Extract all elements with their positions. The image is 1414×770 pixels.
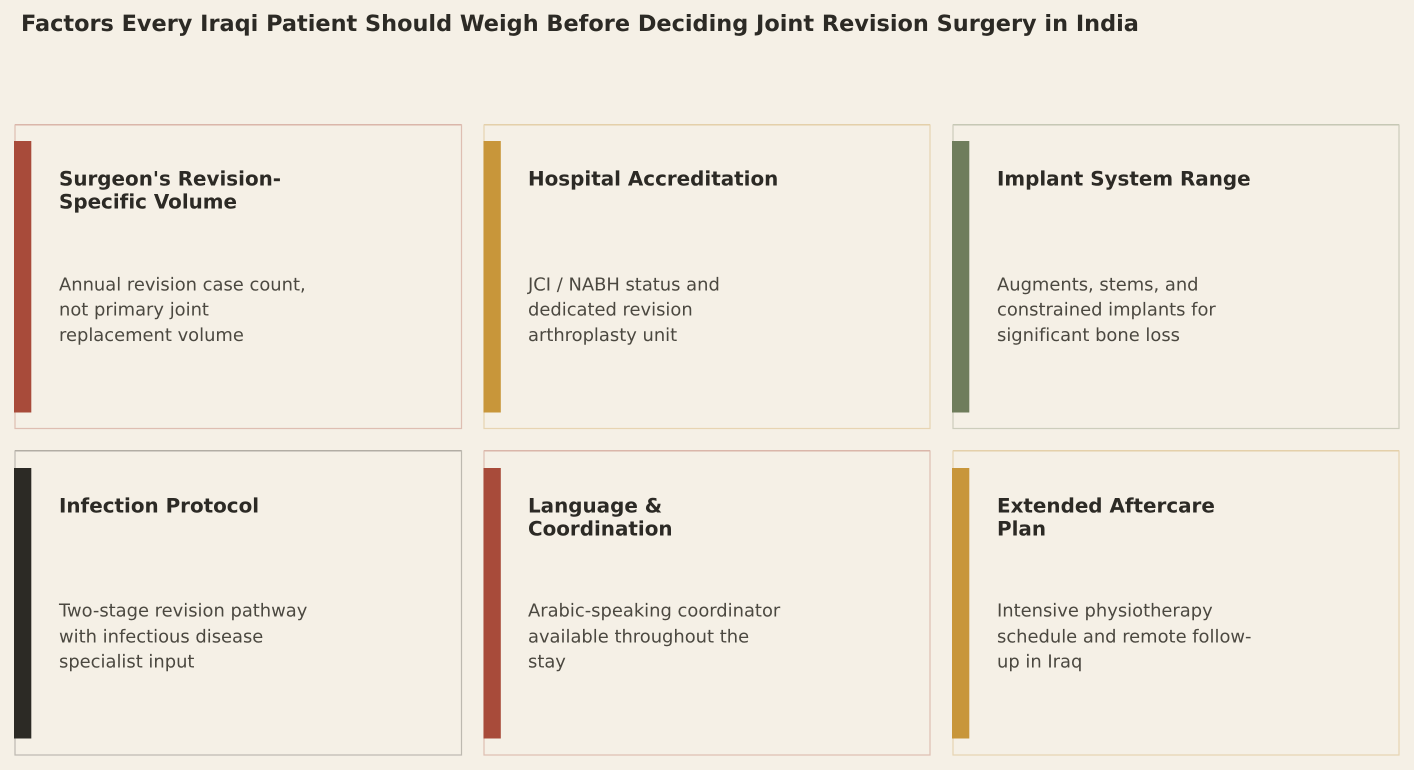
heading: language and coordination: Language & bbox=[528, 494, 662, 518]
accent bar: dark bbox=[14, 468, 31, 738]
text: language description: available throughout the bbox=[528, 626, 749, 648]
accent bar: red bbox=[484, 468, 501, 738]
text: language description: stay bbox=[528, 652, 566, 673]
panel: surgeon's revision-specific volume bbox=[14, 124, 462, 428]
heading: surgeon's revision-specific volume: Surgeon's Revision- bbox=[59, 168, 281, 190]
heading: extended aftercare plan: Plan bbox=[997, 518, 1046, 540]
accent bar: gold bbox=[952, 468, 969, 738]
text: implant description: constrained implants for bbox=[997, 300, 1216, 321]
accent bar: red bbox=[14, 141, 31, 412]
heading: infection protocol: Infection Protocol bbox=[59, 494, 259, 518]
accent bar: green bbox=[952, 141, 969, 412]
panel: implant system range bbox=[952, 124, 1399, 428]
text: aftercare description: Intensive physiotherapy bbox=[997, 601, 1213, 622]
text: surgeon description: not primary joint bbox=[59, 300, 209, 321]
text: implant description: significant bone loss bbox=[997, 325, 1180, 346]
text: implant description: Augments, stems, and bbox=[997, 274, 1199, 296]
heading: hospital accreditation: Hospital Accreditation bbox=[528, 168, 778, 190]
heading: implant system range: Implant System Range bbox=[997, 168, 1251, 190]
text: infection description: Two-stage revision pathway bbox=[59, 601, 307, 622]
text: infection description: specialist input bbox=[59, 652, 194, 673]
heading: surgeon's revision-specific volume: Specific Volume bbox=[59, 190, 237, 214]
heading: language and coordination: Coordination bbox=[528, 518, 673, 540]
text: surgeon description: Annual revision case count, bbox=[59, 274, 306, 296]
panel: extended aftercare plan bbox=[952, 450, 1399, 755]
text: accreditation description: dedicated revision bbox=[528, 300, 693, 321]
text: infection description: with infectious disease bbox=[59, 626, 263, 648]
heading: extended aftercare plan: Extended Aftercare bbox=[997, 494, 1215, 518]
text: surgeon description: replacement volume bbox=[59, 325, 244, 346]
text: accreditation description: arthroplasty unit bbox=[528, 325, 677, 346]
panel: hospital accreditation bbox=[484, 124, 930, 428]
title: Factors Every Iraqi Patient Should Weigh Before Deciding Joint Revision Surgery in India bbox=[21, 11, 1139, 37]
text: aftercare description: up in Iraq bbox=[997, 652, 1082, 673]
text: accreditation description: JCI / NABH status and bbox=[528, 274, 720, 296]
text: aftercare description: schedule and remote follow- bbox=[997, 626, 1251, 648]
accent bar: gold bbox=[484, 141, 501, 412]
panel: infection protocol bbox=[14, 450, 462, 755]
panel: language and coordination bbox=[484, 450, 930, 755]
text: language description: Arabic-speaking coordinator bbox=[528, 601, 780, 622]
